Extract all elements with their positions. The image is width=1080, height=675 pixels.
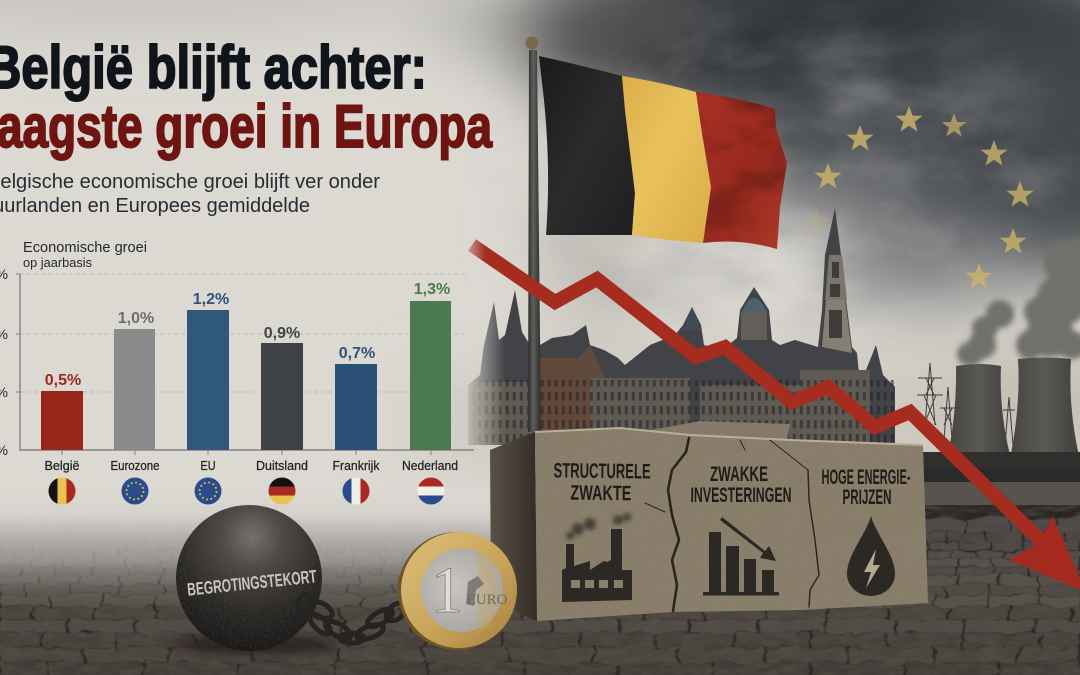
falling red trend arrow: [472, 245, 1080, 592]
chart title: Economische groei: [23, 240, 147, 256]
block label: hoge energieprijzen: PRIJZEN: [842, 486, 892, 509]
bar: Nederland 1,3%: [410, 281, 451, 450]
chain linking ball and coin: [298, 595, 409, 643]
flag: Eurozone: [122, 478, 148, 504]
stormy sky background: [0, 0, 1080, 460]
one euro coin: 1: [430, 554, 464, 627]
concrete block with three causes: [490, 421, 928, 621]
block label: zwakke investeringen: INVESTERINGEN: [690, 484, 792, 507]
icon: factory: [562, 513, 632, 602]
cobblestone ground: [0, 490, 1080, 675]
subtitle: [0, 171, 380, 217]
country labels: Eurozone: [110, 459, 160, 473]
block label: structurele zwakte: [553, 459, 651, 506]
bar: Duitsland 0,9%: 0,9%: [264, 325, 300, 342]
icon: energy drop: [847, 516, 895, 596]
flag: EU: [194, 478, 222, 504]
bar: Duitsland 0,9%: [261, 325, 303, 450]
country labels: België: [44, 459, 80, 473]
title: [0, 34, 492, 160]
block label: hoge energieprijzen: [822, 466, 910, 509]
bar: EU 1,2%: 1,2%: [193, 291, 229, 308]
bar: België 0,5%: 0,5%: [45, 372, 81, 389]
flag: Netherlands: [417, 477, 445, 506]
bar: EU 1,2%: [187, 291, 229, 450]
bar: Frankrijk 0,7%: 0,7%: [339, 345, 375, 362]
flagpole with ball finial: [526, 36, 541, 432]
country labels: [44, 459, 458, 473]
cooling towers: [948, 358, 1080, 468]
country labels: Duitsland: [256, 459, 308, 473]
bar: België 0,5%: [41, 372, 83, 450]
block label: hoge energieprijzen: HOGE ENERGIE-: [822, 466, 910, 489]
bar: Nederland 1,3%: 1,3%: [414, 281, 450, 298]
flag: France: [342, 477, 370, 505]
block label: zwakke investeringen: [690, 463, 792, 507]
icon: falling bars: [703, 517, 779, 596]
river quay behind the block: [920, 452, 1080, 519]
bar: Eurozone 1,0%: 1,0%: [118, 310, 154, 327]
flag: Germany: [268, 477, 296, 506]
title line one: België blijft achter:: [0, 34, 427, 101]
chart title: [23, 240, 147, 270]
flag: Belgium: [48, 477, 76, 505]
Belgian city skyline: [468, 208, 896, 446]
block label: structurele zwakte: ZWAKTE: [570, 482, 631, 505]
bar: Frankrijk 0,7%: [335, 345, 377, 450]
iron ball: begrotingstekort: BEGROTINGSTEKORT: [186, 566, 318, 600]
block label: zwakke investeringen: ZWAKKE: [710, 463, 768, 486]
one euro coin: [398, 532, 517, 650]
country labels: EU: [200, 459, 216, 473]
one euro coin: EURO: [467, 592, 508, 608]
bar: Eurozone 1,0%: [114, 310, 155, 450]
y axis labels: [0, 266, 8, 458]
country labels: Nederland: [402, 459, 458, 473]
smoke from cooling towers: [957, 237, 1080, 366]
block label: structurele zwakte: STRUCTURELE: [553, 459, 651, 484]
power pylons: [917, 363, 1015, 445]
Belgian flag: [539, 56, 787, 249]
bar chart: economic growth: [0, 240, 474, 506]
EU stars in the sky: [803, 106, 1034, 288]
iron ball: begrotingstekort: [175, 505, 335, 654]
cracks in the block: [645, 438, 819, 611]
country labels: Frankrijk: [332, 459, 380, 473]
chart title: op jaarbasis: [23, 256, 92, 270]
